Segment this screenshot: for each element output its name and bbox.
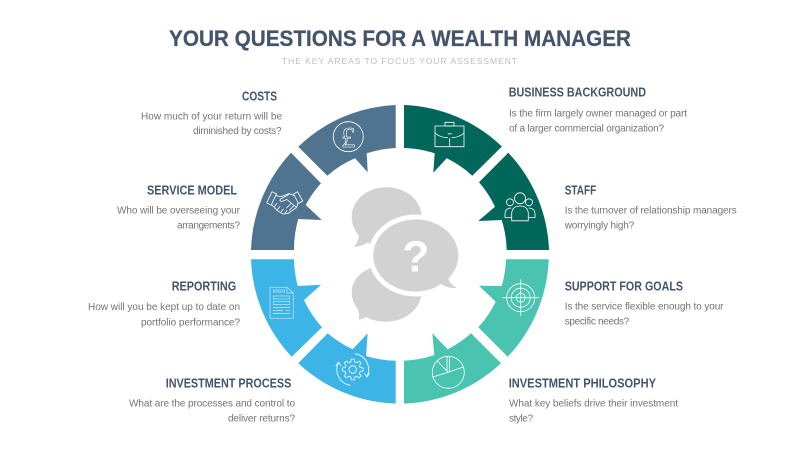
text: investment process: deliver returns? — [228, 414, 295, 425]
text: investment philosophy: style? — [509, 414, 533, 425]
title: YOUR QUESTIONS FOR A WEALTH MANAGER — [169, 26, 631, 51]
text: business background — [509, 86, 687, 135]
text: reporting — [88, 280, 240, 328]
icon: document — [270, 287, 293, 318]
text: investment process — [129, 377, 295, 425]
text: service model: arrangements? — [177, 220, 240, 232]
icon: pound coin: £ — [341, 123, 355, 154]
segment: costs — [298, 105, 396, 176]
bubble: lower — [352, 265, 422, 322]
text: staff: Is the turnover of relationship managers — [565, 205, 737, 216]
icon: gear with arrows — [336, 354, 370, 385]
text: reporting: portfolio performance? — [141, 318, 240, 328]
text: costs: How much of your return will be — [141, 112, 282, 122]
text: reporting: How will you be kept up to date on — [88, 302, 240, 313]
text: service model — [117, 183, 241, 232]
text: investment process: What are the processes and control to — [129, 398, 295, 410]
question mark: ? — [402, 233, 429, 282]
center: speech bubbles — [352, 187, 458, 322]
text: business background: BUSINESS BACKGROUND — [509, 86, 646, 100]
text: service model: SERVICE MODEL — [147, 183, 237, 197]
text: support for goals: specific needs? — [565, 316, 630, 327]
segment: staff — [478, 153, 549, 250]
text: costs — [141, 90, 282, 137]
bubble: upper — [352, 187, 422, 247]
text: investment philosophy: INVESTMENT PHILOSOPHY — [509, 377, 657, 391]
segment: investment philosophy — [404, 333, 501, 404]
segment: service model — [251, 153, 322, 250]
icon: target — [503, 280, 539, 316]
segment: business background — [404, 105, 502, 176]
text: reporting: REPORTING — [172, 280, 236, 294]
text: business background: Is the firm largely owner managed or part — [509, 108, 687, 120]
text: support for goals: Is the service flexible enough to your — [565, 301, 724, 312]
text: staff — [564, 183, 737, 232]
text: staff: worryingly high? — [564, 220, 635, 232]
segment: investment process — [298, 333, 396, 404]
subtitle: THE KEY AREAS TO FOCUS YOUR ASSESSMENT — [282, 56, 517, 66]
icon: pie chart — [432, 356, 464, 388]
text: staff: STAFF — [565, 183, 596, 197]
segment: support for goals — [478, 259, 549, 357]
text: business background: of a larger commercial organization? — [509, 124, 664, 135]
icon: people — [505, 193, 535, 221]
icon: handshake — [267, 192, 303, 214]
text: support for goals — [565, 280, 724, 327]
text: costs: COSTS — [242, 90, 277, 104]
text: support for goals: SUPPORT FOR GOALS — [565, 280, 683, 294]
segment: reporting — [251, 259, 322, 357]
text: investment philosophy: What key beliefs drive their investment — [509, 398, 678, 410]
icon: briefcase — [435, 122, 464, 147]
text: investment philosophy — [509, 377, 678, 425]
text: service model: Who will be overseeing your — [117, 205, 241, 216]
text: investment process: INVESTMENT PROCESS — [166, 377, 291, 391]
text: costs: diminished by costs? — [193, 126, 282, 137]
bubble: main question — [373, 220, 458, 292]
